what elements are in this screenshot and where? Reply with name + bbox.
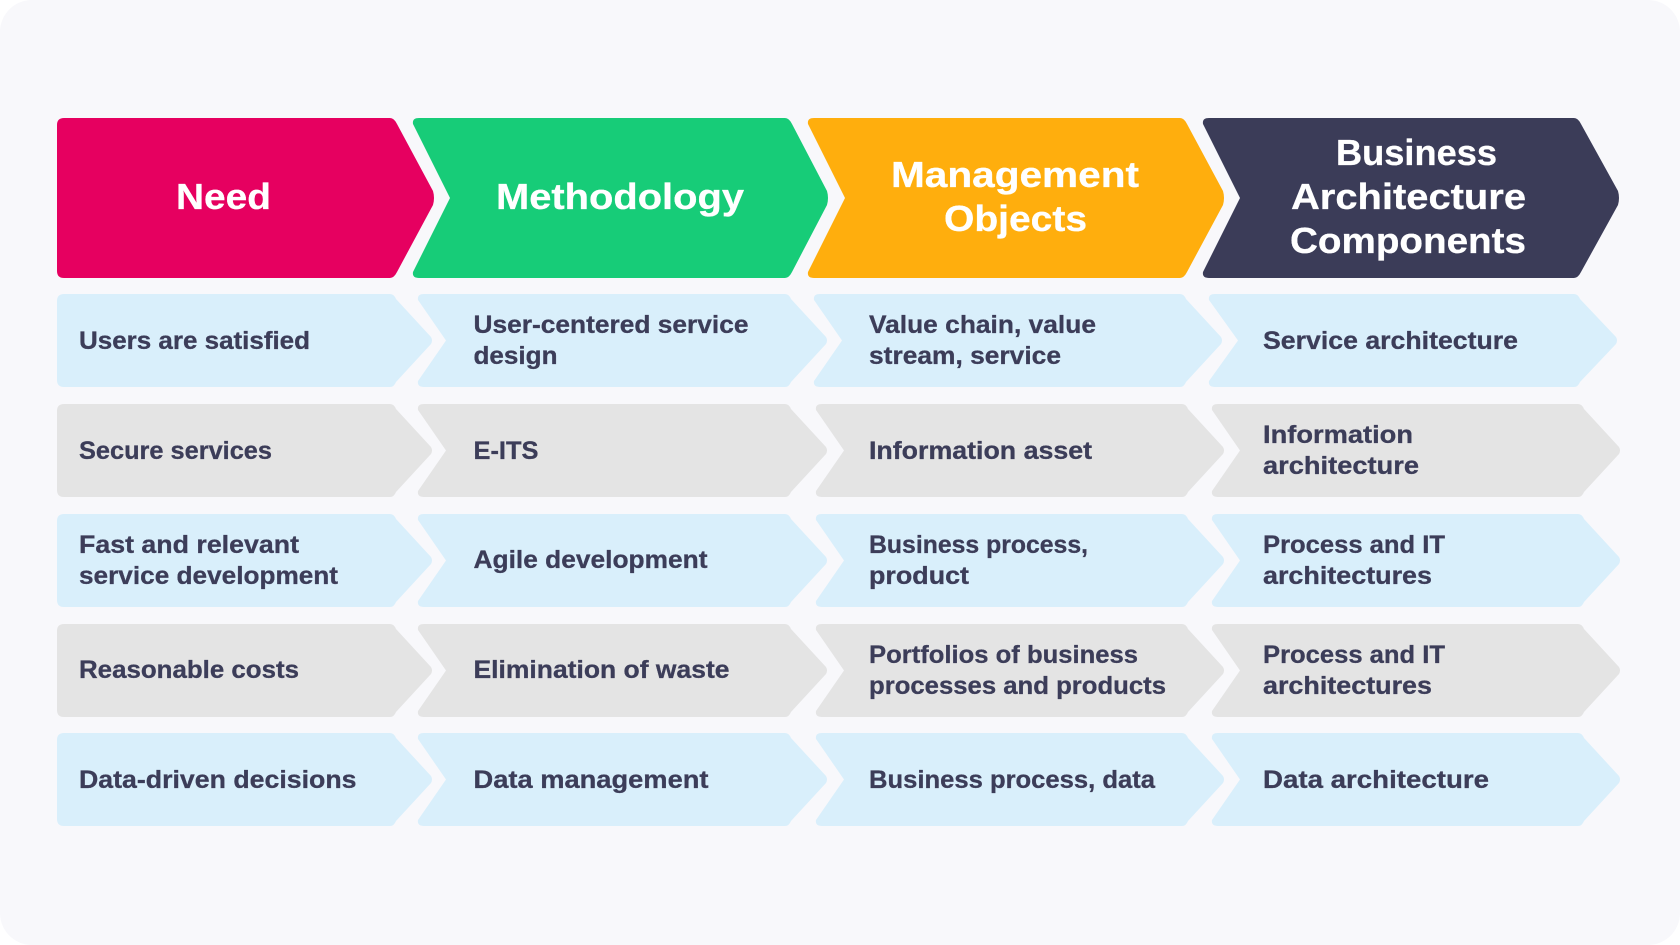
cell: Business process, product xyxy=(816,514,1224,607)
cell: Fast and relevant service development: service development xyxy=(79,562,339,590)
cell: Information architecture: architecture xyxy=(1263,452,1419,480)
header: Methodology xyxy=(413,118,828,278)
cell: Service architecture xyxy=(1209,294,1617,387)
cell: Process and IT architectures (row 4): Process and IT xyxy=(1263,641,1445,669)
header: Need xyxy=(57,118,434,278)
row 1 xyxy=(57,294,1617,387)
row 5 xyxy=(57,733,1620,826)
cell: Data-driven decisions xyxy=(57,733,432,826)
cell: Business process, data xyxy=(816,733,1224,826)
cell: Process and IT architectures (row 4): architectures xyxy=(1263,672,1432,700)
cell: Information architecture: Information xyxy=(1263,421,1413,449)
cell: User-centered service design: design xyxy=(474,342,558,370)
cell: Service architecture: Service architecture xyxy=(1263,327,1518,355)
cell: Reasonable costs: Reasonable costs xyxy=(79,656,299,684)
cell: Business process, product: Business process, xyxy=(869,531,1088,559)
cell: Portfolios of business processes and products: processes and products xyxy=(869,672,1166,700)
cell: Business process, product: product xyxy=(869,562,970,590)
cell: Information asset xyxy=(816,404,1224,497)
cell: User-centered service design xyxy=(418,294,827,387)
header: Management Objects xyxy=(808,118,1224,278)
cell: Process and IT architectures xyxy=(1212,514,1620,607)
cell: Value chain, value stream, service xyxy=(814,294,1222,387)
header row xyxy=(57,118,1619,278)
cell: Fast and relevant service development: Fast and relevant xyxy=(79,531,300,559)
cell: Reasonable costs xyxy=(57,624,432,717)
cell: Data architecture xyxy=(1212,733,1620,826)
row 3 xyxy=(57,514,1620,607)
header: Business Architecture Components: Architecture xyxy=(1291,176,1526,217)
cell: Value chain, value stream, service: Value chain, value xyxy=(869,311,1096,339)
cell: Process and IT architectures: Process and IT xyxy=(1263,531,1445,559)
header: Need: Need xyxy=(176,176,271,217)
row 4 xyxy=(57,624,1620,717)
cell: E-ITS: E-ITS xyxy=(474,437,538,465)
cell: Data-driven decisions: Data-driven decisions xyxy=(79,766,356,794)
cell: Data management: Data management xyxy=(474,766,709,794)
cell: Data management xyxy=(418,733,827,826)
header: Management Objects: Management xyxy=(891,154,1139,195)
cell: Users are satisfied xyxy=(57,294,432,387)
row 2 xyxy=(57,404,1620,497)
cell: Information architecture xyxy=(1212,404,1620,497)
cell: Portfolios of business processes and products xyxy=(816,624,1224,717)
cell: Elimination of waste: Elimination of waste xyxy=(474,656,730,684)
header: Methodology: Methodology xyxy=(496,176,744,217)
cell: Process and IT architectures (row 4) xyxy=(1212,624,1620,717)
cell: Business process, data: Business process, data xyxy=(869,766,1156,794)
cell: Data architecture: Data architecture xyxy=(1263,766,1489,794)
cell: Value chain, value stream, service: stream, service xyxy=(869,342,1061,370)
header: Management Objects: Objects xyxy=(944,198,1087,239)
cell: Information asset: Information asset xyxy=(869,437,1093,465)
cell: Portfolios of business processes and products: Portfolios of business xyxy=(869,641,1138,669)
cell: Secure services xyxy=(57,404,432,497)
cell: Fast and relevant service development xyxy=(57,514,432,607)
cell: Secure services: Secure services xyxy=(79,437,272,465)
cell: Agile development xyxy=(418,514,827,607)
header: Business Architecture Components: Business xyxy=(1336,132,1497,173)
cell: Agile development: Agile development xyxy=(474,546,708,574)
cell: User-centered service design: User-centered service xyxy=(474,311,749,339)
cell: E-ITS xyxy=(418,404,827,497)
header: Business Architecture Components: Components xyxy=(1290,220,1526,261)
cell: Elimination of waste xyxy=(418,624,827,717)
cell: Users are satisfied: Users are satisfied xyxy=(79,327,310,355)
cell: Process and IT architectures: architectures xyxy=(1263,562,1432,590)
header: Business Architecture Components xyxy=(1203,118,1619,278)
